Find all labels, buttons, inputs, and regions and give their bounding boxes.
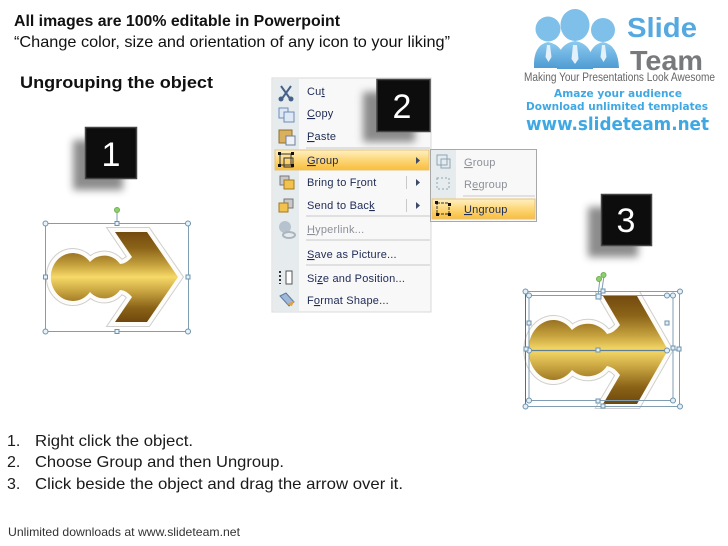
instructions list: Choose Group and then Ungroup. xyxy=(35,454,284,471)
menu labels: Bring to Front xyxy=(307,177,376,189)
menu labels: Copy xyxy=(307,108,334,120)
menu labels: Group xyxy=(307,155,339,167)
selection frames xyxy=(526,276,680,406)
menu labels: Size and Position... xyxy=(307,273,405,285)
arrow shape xyxy=(528,296,668,404)
logo: Slide Team: Download unlimited templates xyxy=(526,100,708,113)
menu labels: Cut xyxy=(307,86,325,98)
selection handles xyxy=(523,272,682,409)
selection handles xyxy=(43,208,190,334)
menu labels xyxy=(307,86,405,307)
heading: editable note: All images are 100% editable in Powerpoint xyxy=(14,13,340,30)
instructions list: Click beside the object and drag the arrow over it. xyxy=(35,476,403,493)
logo: Slide Team xyxy=(524,9,715,135)
step 1 arrow with selection box xyxy=(43,208,190,334)
icon: team of three people xyxy=(534,9,619,69)
context menu xyxy=(272,78,431,312)
instructions list: 1. xyxy=(7,433,20,450)
step 3 badge xyxy=(588,194,652,257)
menu labels: Format Shape... xyxy=(307,295,389,307)
selection frame xyxy=(46,224,188,332)
submenu xyxy=(430,150,536,222)
instructions list: 2. xyxy=(7,454,20,471)
heading: ungrouping the object: Ungrouping the object xyxy=(20,73,213,92)
highlighted item: Ungroup xyxy=(432,199,535,219)
menu labels: Hyperlink... xyxy=(307,224,364,236)
step 1 badge xyxy=(73,128,136,190)
step 2 badge: 2 xyxy=(393,88,411,126)
arrow shape xyxy=(51,232,178,322)
menu labels: Paste xyxy=(307,131,336,143)
submenu: Group xyxy=(464,157,496,169)
menu separators xyxy=(306,148,430,265)
submenu: Ungroup xyxy=(464,204,508,216)
instructions list xyxy=(7,433,403,493)
submenu arrows xyxy=(416,157,420,209)
instructions list: Right click the object. xyxy=(35,433,193,450)
menu labels: Send to Back xyxy=(307,200,375,212)
instructions list: 3. xyxy=(7,476,20,493)
menu labels: Save as Picture... xyxy=(307,249,397,261)
step 2 badge xyxy=(363,80,430,142)
logo: Slide Team: www.slideteam.net xyxy=(526,114,709,135)
step 1 badge: 1 xyxy=(102,136,120,174)
heading: editable note xyxy=(14,13,450,51)
menu panel xyxy=(272,78,431,312)
logo: Slide Team: Amaze your audience xyxy=(554,87,682,100)
submenu icons xyxy=(437,155,450,189)
highlighted item: Group xyxy=(275,150,429,170)
submenu: Regroup xyxy=(464,179,508,191)
heading: editable note: “Change color, size and orientation of any icon to your liking” xyxy=(14,34,450,51)
logo: Slide Team: Team xyxy=(630,45,703,76)
step 3 badge: 3 xyxy=(617,202,635,240)
step 3 arrow with ungrouped selection boxes xyxy=(523,272,682,409)
logo: Slide Team: Slide xyxy=(627,12,697,43)
menu icons xyxy=(278,86,295,306)
footer: Unlimited downloads at www.slideteam.net xyxy=(8,525,241,539)
